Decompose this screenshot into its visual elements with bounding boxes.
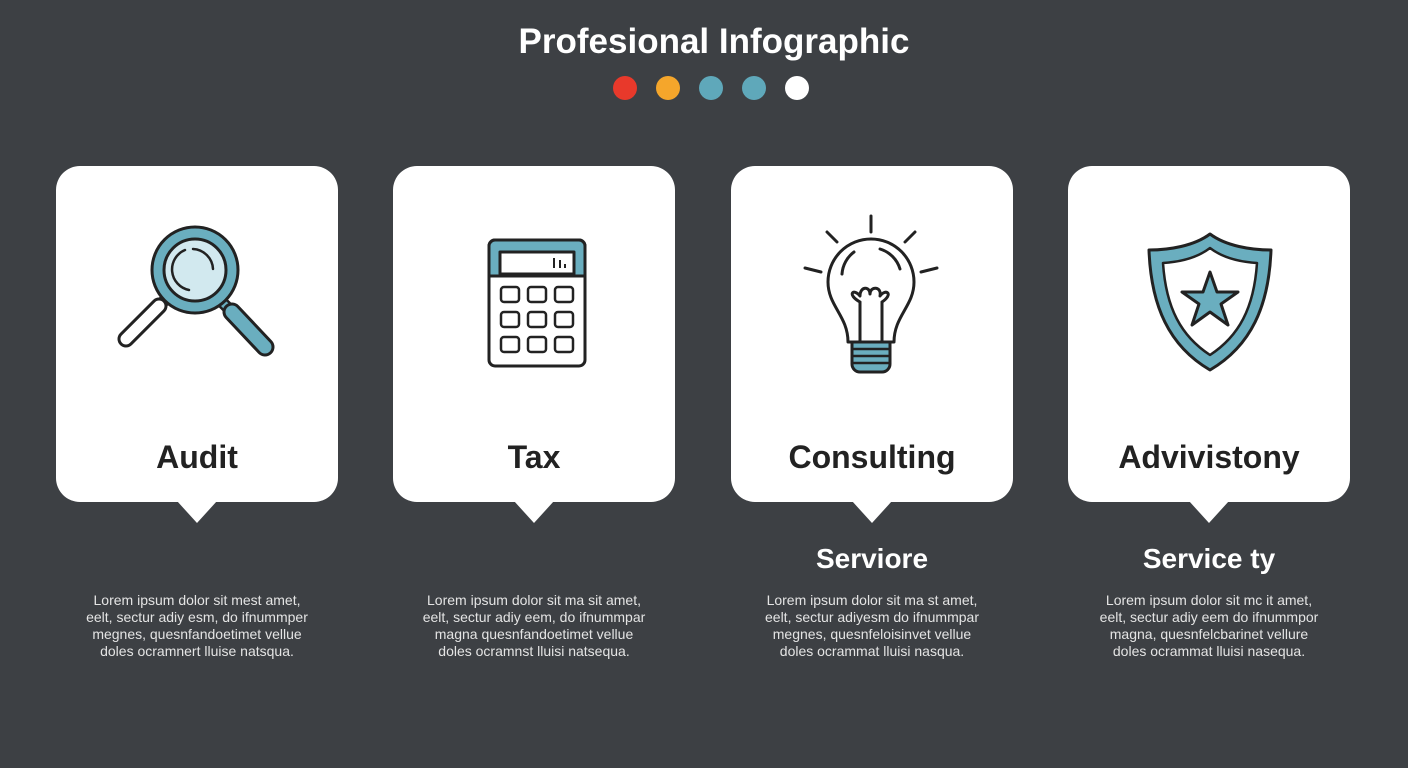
text: Consulting description: Lorem ipsum dolor sit ma st amet, (767, 592, 977, 608)
text: Audit description: eelt, sectur adiy esm, do ifnummper (86, 609, 308, 625)
card: Consulting: Consulting (788, 439, 956, 475)
card: Tax (393, 166, 675, 502)
text: Audit description: megnes, quesnfandoetimet vellue (92, 626, 302, 642)
card: Audit (56, 166, 338, 502)
card: Advivistony: Advivistony (1118, 439, 1300, 475)
card: Advivistony (1068, 166, 1350, 502)
card: Tax: Tax (508, 439, 560, 475)
text: Tax description (423, 592, 646, 659)
icon: shield with star (1148, 232, 1272, 372)
text: Advivistony description: doles ocrammat lluisi nasequa. (1113, 643, 1305, 659)
text: Tax description: doles ocramnst lluisi natsequa. (438, 643, 630, 659)
subheading: Service ty: Service ty (1143, 543, 1275, 574)
text: Audit description: Lorem ipsum dolor sit mest amet, (94, 592, 300, 608)
text: Tax description: Lorem ipsum dolor sit ma sit amet, (427, 592, 641, 608)
text: Tax description: magna quesnfandoetimet vellue (435, 626, 633, 642)
card: Consulting (731, 166, 1013, 502)
text: Advivistony description: eelt, sectur adiy eem do ifnummpor (1100, 609, 1318, 625)
text: Audit description (86, 592, 308, 659)
text: Advivistony description (1100, 592, 1318, 659)
subheading: Serviore: Serviore (816, 543, 928, 574)
text: Consulting description: eelt, sectur adiyesm do ifnummpar (765, 609, 979, 625)
text: Tax description: eelt, sectur adiy eem, do ifnummpar (423, 609, 645, 625)
text: Audit description: doles ocramnert lluise natsqua. (100, 643, 294, 659)
text: Advivistony description: Lorem ipsum dolor sit mc it amet, (1106, 592, 1312, 608)
text: Advivistony description: magna, quesnfelcbarinet vellure (1110, 626, 1308, 642)
text: Consulting description: megnes, quesnfeloisinvet vellue (773, 626, 971, 642)
icon: light bulb (804, 214, 938, 374)
icon: magnifier (118, 226, 274, 356)
icon: calculator (488, 238, 586, 368)
color dots (613, 76, 809, 100)
card: Audit: Audit (156, 439, 238, 475)
text: Consulting description (765, 592, 979, 659)
text: Consulting description: doles ocrammat lluisi nasqua. (780, 643, 964, 659)
title: Profesional Infographic (519, 22, 909, 61)
